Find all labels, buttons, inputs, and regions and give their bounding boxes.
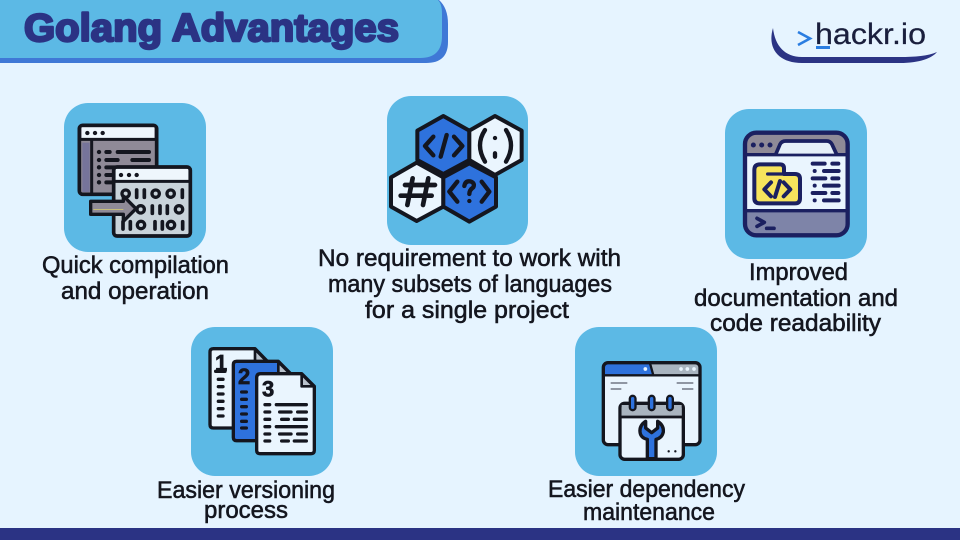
panel: dependency maintenance: [548, 327, 745, 526]
label: dependency maintenance: Easier dependency: [548, 476, 745, 503]
icon: numbered documents: 1: [215, 351, 227, 376]
hackr.io logo: [771, 18, 937, 63]
panel: versioning: [157, 327, 335, 524]
panel: documentation and readability: [694, 109, 898, 337]
icon: code windows with arrow: [79, 125, 190, 236]
logo chevron: [798, 32, 810, 45]
label: versioning: Easier versioning: [157, 477, 335, 504]
label: no language subsets: [318, 245, 621, 324]
label: versioning: process: [204, 497, 288, 524]
icon: browser window with code folder: [745, 133, 848, 235]
logo underline: [816, 46, 830, 49]
footer bar: [0, 528, 960, 540]
icon: numbered documents: [210, 349, 314, 454]
label: no language subsets: No requirement to work with: [318, 245, 621, 272]
label: versioning: [157, 477, 335, 524]
label: documentation and readability: code readability: [710, 310, 881, 337]
label: no language subsets: many subsets of languages: [328, 271, 612, 298]
label: documentation and readability: [694, 259, 898, 337]
icon: window with calendar and wrench: [603, 363, 700, 459]
panel: no language subsets: [318, 96, 621, 324]
label: documentation and readability: Improved: [749, 259, 848, 286]
panel: quick compilation: [42, 103, 229, 305]
label: no language subsets: for a single project: [365, 297, 569, 324]
label: documentation and readability: documentation and: [694, 285, 898, 312]
icon: numbered documents: 2: [238, 364, 250, 389]
icon: numbered documents: 3: [262, 377, 274, 402]
icon: code hexagons: [391, 116, 522, 222]
label: dependency maintenance: maintenance: [583, 499, 715, 526]
logo wordmark: hackr.io: [815, 18, 926, 51]
label: quick compilation: and operation: [61, 278, 209, 305]
label: quick compilation: [42, 252, 229, 305]
title: Golang Advantages: [24, 7, 399, 50]
label: quick compilation: Quick compilation: [42, 252, 229, 279]
logo swoosh: [771, 28, 937, 63]
label: dependency maintenance: [548, 476, 745, 526]
header banner: [0, 0, 448, 63]
